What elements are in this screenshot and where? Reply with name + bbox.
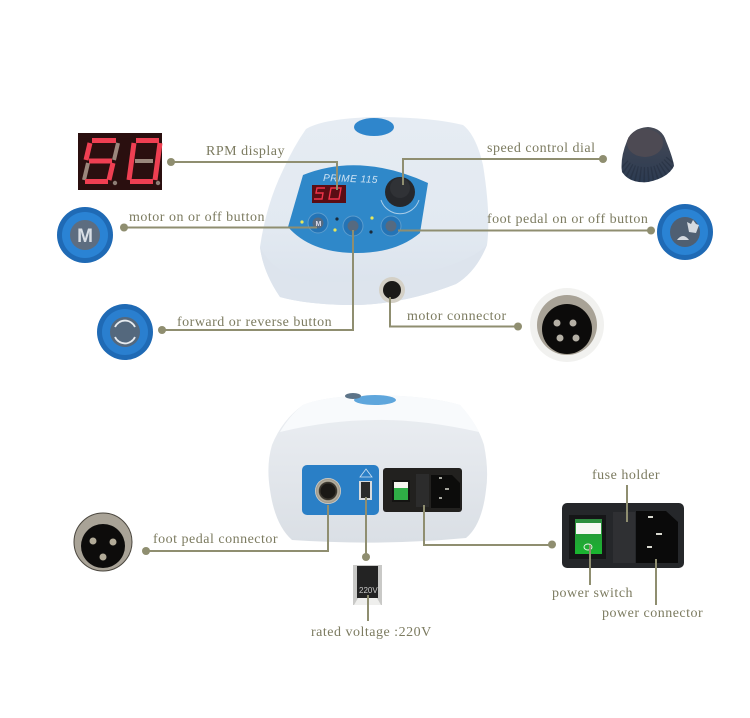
icon: motor connector photo bbox=[530, 288, 604, 362]
callout: motor on or off button: motor on or off button bbox=[129, 210, 265, 225]
RPM display photo bbox=[78, 133, 162, 190]
callout: speed control dial bbox=[403, 141, 607, 185]
callout: foot pedal connector: foot pedal connector bbox=[153, 532, 278, 547]
blue rear plate bbox=[302, 465, 379, 515]
device: rear view bbox=[268, 393, 487, 543]
motor button: M bbox=[316, 221, 322, 228]
black power module bbox=[383, 468, 462, 512]
icon: voltage selector photo: 220V bbox=[359, 586, 378, 595]
lower edge band bbox=[260, 245, 487, 305]
icon: M button: M bbox=[77, 226, 93, 247]
callout: rated voltage: rated voltage :220V bbox=[311, 625, 432, 640]
callout: fuse holder: fuse holder bbox=[592, 468, 660, 483]
device: front view bbox=[260, 117, 488, 305]
warning symbol bbox=[360, 469, 372, 477]
callout: speed control dial: speed control dial bbox=[487, 141, 596, 156]
callout: motor on or off button bbox=[120, 210, 317, 232]
callout: forward or reverse button bbox=[158, 230, 353, 334]
voltage selector bbox=[359, 481, 372, 500]
callout: foot pedal on or off button bbox=[398, 212, 655, 234]
callout: power switch bbox=[552, 545, 633, 601]
reverse button bbox=[343, 216, 363, 236]
callout: power connector bbox=[602, 559, 703, 621]
motor button bbox=[308, 213, 328, 233]
callout: rated voltage bbox=[311, 497, 432, 640]
icon: M button bbox=[57, 207, 113, 263]
callout: power connector: power connector bbox=[602, 606, 703, 621]
indicator lights bbox=[300, 216, 374, 234]
callout: power switch: power switch bbox=[552, 586, 633, 601]
control panel bbox=[288, 165, 428, 253]
foot button bbox=[381, 216, 401, 236]
lid bbox=[280, 395, 479, 432]
callout: motor connector bbox=[390, 297, 522, 330]
icon: reverse button bbox=[97, 304, 153, 360]
motor socket bbox=[379, 277, 405, 303]
power module photo bbox=[562, 503, 684, 568]
small red display bbox=[312, 185, 346, 203]
callout: module link bbox=[424, 505, 556, 548]
icon: speed control knob bbox=[622, 127, 674, 182]
callout: RPM display: RPM display bbox=[206, 144, 285, 159]
callout: forward or reverse button: forward or reverse button bbox=[177, 315, 332, 330]
callout: motor connector: motor connector bbox=[407, 309, 507, 324]
power socket bbox=[636, 511, 678, 563]
icon: foot pedal connector photo bbox=[74, 513, 132, 571]
callout: fuse holder bbox=[592, 468, 660, 522]
brand text: PRIME 115 bbox=[323, 173, 378, 186]
callout: RPM display bbox=[167, 144, 337, 190]
power switch bbox=[569, 515, 606, 559]
callout: foot pedal connector bbox=[142, 505, 328, 555]
callout: foot pedal on or off button: foot pedal on or off button bbox=[487, 212, 648, 227]
fuse holder bbox=[613, 512, 635, 563]
icon: foot pedal button bbox=[657, 204, 713, 260]
speed dial bbox=[381, 177, 419, 214]
rear foot pedal socket bbox=[315, 478, 341, 504]
icon: voltage selector photo bbox=[353, 565, 382, 605]
logo badge bbox=[354, 118, 394, 136]
